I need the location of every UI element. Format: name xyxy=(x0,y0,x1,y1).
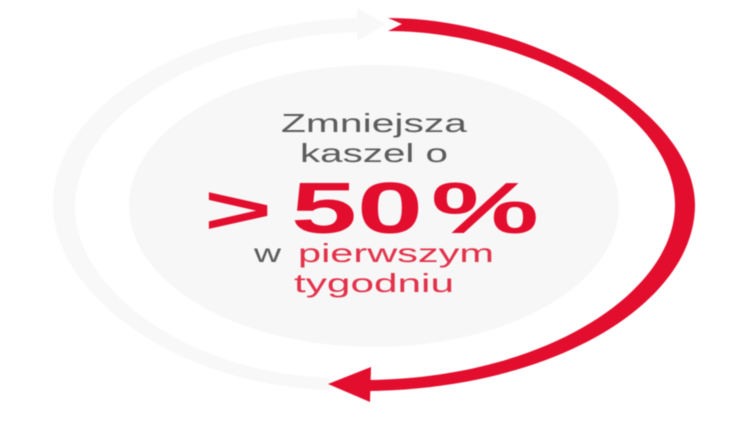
headline stat: >50%: 50 xyxy=(291,169,423,249)
text: w pierwszym tygodniu: w xyxy=(253,238,281,268)
text: Zmniejsza kaszel o xyxy=(281,108,468,168)
red circular arrow xyxy=(328,18,695,402)
headline stat: >50%: % xyxy=(431,169,539,249)
center panel: gray ellipse xyxy=(129,65,619,347)
text: w pierwszym tygodniu xyxy=(253,238,494,298)
light gray circular arrow xyxy=(53,8,386,390)
text: w pierwszym tygodniu: tygodniu xyxy=(294,268,454,298)
text: Zmniejsza kaszel o: kaszel o xyxy=(300,138,448,168)
text: w pierwszym tygodniu: pierwszym xyxy=(298,238,494,268)
headline stat: >50%: > xyxy=(204,172,272,248)
headline stat: >50% xyxy=(204,169,539,249)
text: Zmniejsza kaszel o: Zmniejsza xyxy=(281,108,468,138)
